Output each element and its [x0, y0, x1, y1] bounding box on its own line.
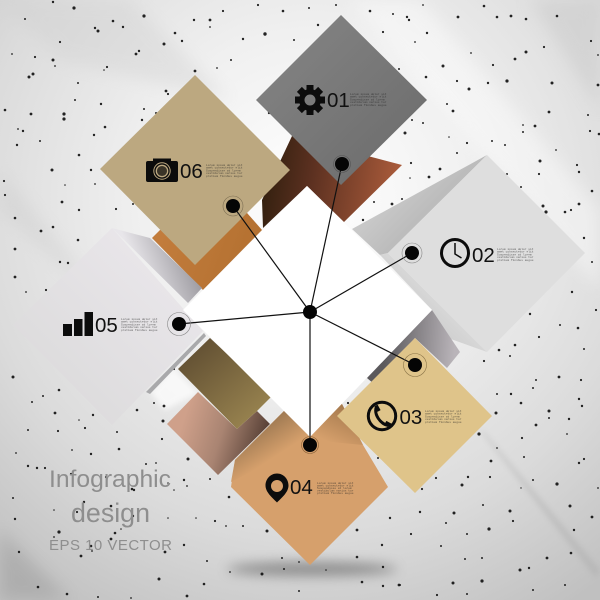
- node 06: [223, 196, 243, 216]
- text block 04: pretium finibus augue: [317, 491, 354, 495]
- text block 02: amet consectetur elit: [497, 250, 534, 254]
- text block 01: Lorem ipsum dolor sit: [350, 92, 387, 96]
- text block 05: Lorem ipsum dolor sit: [121, 317, 158, 321]
- text block 04: vestibulum varius tor: [317, 488, 354, 492]
- text block 05: vestibulum varius tor: [121, 325, 158, 329]
- text block 05: Suspendisse at lorem: [121, 322, 156, 326]
- text block 01: Suspendisse at lorem: [350, 97, 385, 101]
- number 02: 02: [472, 244, 495, 267]
- text block 06: pretium finibus augue: [206, 174, 243, 178]
- text block 04: Lorem ipsum dolor sit: [317, 481, 354, 485]
- text block 01: amet consectetur elit: [350, 95, 387, 99]
- text block 02: vestibulum varius tor: [497, 255, 534, 259]
- text block 04: amet consectetur elit: [317, 484, 354, 488]
- text block 02: Suspendisse at lorem: [497, 252, 532, 256]
- centre white diamond: [183, 186, 432, 437]
- fold wedge: [352, 155, 487, 255]
- number 01: 01: [327, 89, 350, 112]
- face: [388, 155, 585, 352]
- node 05: [168, 312, 190, 336]
- number 05: 05: [95, 314, 118, 337]
- right fold shading: [310, 404, 363, 445]
- text block 03: pretium finibus augue: [425, 420, 462, 424]
- title line 1: Infographic: [49, 466, 171, 493]
- text block 06: vestibulum varius tor: [206, 171, 243, 175]
- back plate: olive: [178, 338, 272, 429]
- number 06: 06: [180, 160, 203, 183]
- connector network: [168, 156, 426, 454]
- text block 05: amet consectetur elit: [121, 320, 158, 324]
- face: [13, 228, 203, 425]
- text block 03: Suspendisse at lorem: [425, 414, 460, 418]
- hub: [303, 305, 317, 319]
- panel 06: tan: [100, 75, 290, 265]
- back plate: rose: [167, 392, 270, 475]
- panel 05: lilac fold: [13, 228, 206, 425]
- number 04: 04: [290, 476, 313, 499]
- text block 01: pretium finibus augue: [350, 103, 387, 107]
- face: [337, 338, 492, 493]
- panel 03: yellow: [337, 338, 492, 493]
- text block 06: Lorem ipsum dolor sit: [206, 163, 243, 167]
- spoke lines: [179, 164, 415, 445]
- text block 06: Suspendisse at lorem: [206, 168, 241, 172]
- text block 02: pretium finibus augue: [497, 258, 534, 262]
- fold wedge: [112, 228, 202, 303]
- title line 3: EPS 10 VECTOR: [49, 537, 172, 554]
- node 03: [404, 354, 426, 376]
- icon: map pin: [266, 474, 288, 502]
- text block 05: pretium finibus augue: [121, 328, 158, 332]
- icon: clock: [442, 240, 468, 266]
- text block 02: Lorem ipsum dolor sit: [497, 247, 534, 251]
- text block 03: Lorem ipsum dolor sit: [425, 409, 462, 413]
- title line 2: design: [71, 498, 150, 528]
- lower fold shading: [380, 253, 487, 352]
- left fold shading: [231, 395, 310, 482]
- lower edge strip: [146, 333, 206, 394]
- icon: gear: [295, 85, 325, 115]
- face: [231, 395, 388, 565]
- text block 03: vestibulum varius tor: [425, 417, 462, 421]
- panel 02: grey fold: [352, 155, 585, 352]
- node 01: [334, 156, 350, 172]
- title: [49, 466, 172, 554]
- back plate: orange behind 06: [152, 205, 262, 290]
- back plate: brown behind 01: [262, 136, 402, 228]
- panel 04: orange: [231, 395, 388, 565]
- icon: phone: [368, 402, 396, 430]
- node 02: [402, 243, 422, 263]
- text block 04: Suspendisse at lorem: [317, 486, 352, 490]
- text block 03: amet consectetur elit: [425, 412, 462, 416]
- panel 01: dark grey: [256, 15, 427, 185]
- icon: bar chart: [63, 312, 93, 336]
- text block 01: vestibulum varius tor: [350, 100, 387, 104]
- text block 06: amet consectetur elit: [206, 166, 243, 170]
- face: [256, 15, 427, 185]
- back plate: grey strip behind 03: [367, 310, 460, 384]
- shadow under diagram: [227, 562, 397, 576]
- number 03: 03: [400, 406, 422, 429]
- face: [100, 75, 290, 265]
- icon: camera: [146, 158, 178, 182]
- node 04: [302, 436, 318, 454]
